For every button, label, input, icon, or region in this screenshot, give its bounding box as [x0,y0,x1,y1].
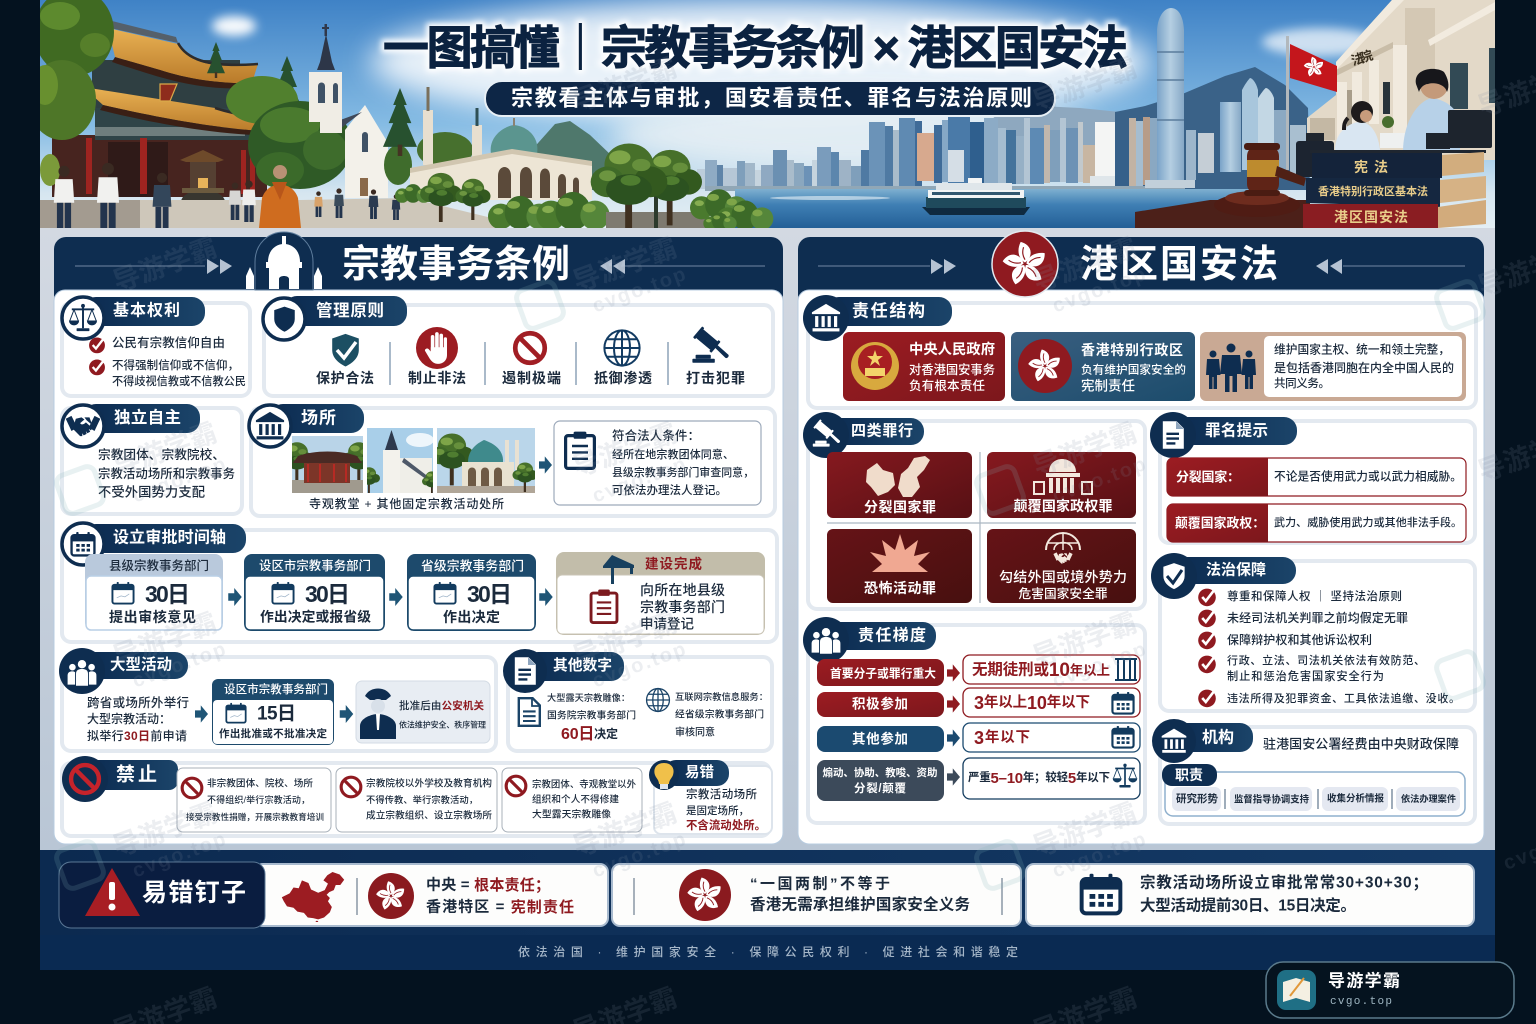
step: construction complete: 申请登记 [640,616,694,632]
section: 机构: 依法办理案件 [1401,793,1456,804]
section: 大型活动: 拟举行30日前申请 [87,728,187,743]
section: 法治保障: 保障辩护权和其他诉讼权利 [1227,632,1372,647]
box: ban 3 [502,768,642,832]
row: 积极参加: 3年以上10年以下 [974,693,1090,713]
box: 法人条件: 县级宗教事务部门审查同意， [612,465,754,479]
row: 分裂国家: 分裂国家： [1176,470,1240,484]
icon: no sign [515,333,545,363]
section: 机构: 研究形势 [1176,792,1218,805]
plaza and visitors [40,163,500,230]
row: 煽动协助 [817,758,1140,801]
section: 管理原则: 打击犯罪 [686,370,745,386]
pine and minarets [383,87,482,185]
section: 其他数字: 国务院宗教事务部门 [547,708,636,722]
watermarks: cvgo.top [590,453,690,507]
skyline [697,78,1306,191]
box: 15日: 15日 [257,704,296,724]
card: HKSAR: 宪制责任 [1081,378,1135,394]
gavel [1218,143,1306,205]
card: 分裂国家罪 [827,452,972,518]
step: province: 作出决定 [443,609,500,625]
card: 勾结外国罪 [987,529,1136,603]
box: ban 1 [177,768,331,832]
section: 禁止: 禁止 [116,764,157,786]
row: 积极参加: 积极参加 [852,696,908,712]
tagline strip [40,935,1495,970]
watermarks: 导游学霸 [569,607,681,673]
section: 法治保障: 违法所得及犯罪资金、工具依法追缴、没收。 [1227,691,1460,705]
section: 场所: 寺观教堂 + 其他固定宗教活动处所 [309,496,504,511]
row: 积极参加 [817,688,1140,717]
church [309,24,388,198]
row: 首要分子 [817,655,1140,686]
law books stack: 香港特别行政区基本法 [1318,184,1428,198]
section: 其他数字: 大型露天宗教雕像： [547,692,630,703]
hero banner illustration [28,0,1495,234]
box: ban 1: 不得组织/举行宗教活动， [207,794,310,805]
step: county [85,554,223,630]
tag: 易错钉子: 易错钉子 [142,879,246,907]
row: 煽动协助: 煽动、协助、教唆、资助 [822,766,938,779]
card: shared duty: 是包括香港同胞在内全中国人民的 [1274,360,1454,375]
right panel heading: 港区国安法 [1080,244,1278,286]
section: 大型活动: 大型宗教活动： [87,711,171,726]
card: 分裂国家罪: 分裂国家罪 [864,499,936,515]
section: 其他数字: 经省级宗教事务部门 [675,708,764,720]
footer band [40,850,1495,935]
left panel heading: 宗教事务条例 [342,244,570,286]
section: 场所 [249,404,775,516]
box: ban 2: 宗教院校以外学校及教育机构 [366,778,492,790]
icon: globe [604,330,640,366]
watermarks: 导游学霸 [109,607,221,673]
section: 法治保障: 制止和惩治危害国家安全行为 [1227,669,1384,683]
step: county: 县级宗教事务部门 [109,558,209,573]
section: 其他数字 [503,649,772,751]
box: ban 1: 非宗教团体、院校、场所 [207,778,313,790]
section: 其他数字: 审核同意 [675,726,715,738]
icon: stop hand [416,327,458,369]
subtitle pill [485,81,1055,116]
row: 其他参加 [817,723,1140,752]
card: HKSAR: 香港特别行政区 [1081,342,1183,358]
card: central government: 负有根本责任 [909,378,985,393]
right header arrows [818,259,1465,274]
section: 基本权利: 基本权利 [113,300,180,320]
step: province: 省级宗教事务部门 [421,558,524,574]
watermarks: 导游学霸 [1029,417,1141,483]
card: HKSAR [1011,332,1195,401]
far hills [994,106,1116,145]
court building: 法院 [1349,47,1375,69]
watermarks: 导游学霸 [569,52,681,118]
section: 场所: 场所 [301,408,336,428]
watermarks: cvgo.top [1050,638,1150,692]
section: 机构: 机构 [1202,728,1234,746]
section: 基本权利: 不得强制信仰或不信仰， [112,358,239,372]
icon: gavel [692,326,729,363]
step: county: 提出审核意见 [109,609,196,625]
row: 煽动协助: 分裂/颠覆 [854,781,906,795]
law books stack: 宪法 [1354,159,1388,175]
step: province: 30日 [467,581,512,607]
icon: church dome [246,232,322,290]
callout: 易错: 是固定场所， [686,804,749,817]
step: construction complete: 向所在地县级 [640,582,725,598]
foreground trees [395,144,773,234]
harbour water [735,189,1255,228]
box: ban 2 [336,768,497,832]
row: 其他参加: 其他参加 [852,730,908,746]
photo: church [367,428,433,493]
card: 一国两制: “一国两制”不等于 [750,874,890,892]
row: 煽动协助: 严重5–10年；较轻5年以下 [968,770,1110,786]
officers at desk [1296,69,1492,177]
section: 管理原则: 遏制极端 [502,370,561,386]
mosque [410,118,592,200]
section: 独立自主: 不受外国势力支配 [98,484,205,500]
card: 颠覆国家政权罪 [987,452,1136,518]
step: county: 30日 [145,581,190,607]
left trees [28,0,352,189]
card: 勾结外国罪: 危害国家安全罪 [1018,586,1108,601]
step: construction complete: 宗教事务部门 [640,599,725,615]
box: ban 3: 组织和个人不得修建 [532,794,619,806]
card: 颠覆国家政权罪: 颠覆国家政权罪 [1014,498,1112,514]
card: central government: 中央人民政府 [909,340,995,358]
box: 公安机关: 批准后由公安机关 [399,699,484,712]
section: 责任梯度: 责任梯度 [858,626,926,644]
row: 其他参加: 3年以下 [974,728,1030,748]
callout: 易错: 不含流动处所。 [686,818,766,832]
ferry [922,178,1030,215]
row: 颠覆国家政权 [1167,504,1466,542]
watermarks: cvgo.top [130,828,230,882]
section: 法治保障: 行政、立法、司法机关依法有效防范、 [1227,653,1425,667]
section: 机构: 收集分析情报 [1327,792,1384,804]
section: 法治保障 [1151,553,1475,711]
icon: crane [603,555,634,584]
law books stack [1303,150,1486,228]
section: 其他数字: 60日决定 [561,726,618,742]
section: 基本权利: 公民有宗教信仰自由 [112,335,225,350]
card: 根本责任 vs 宪制责任: 香港特区 = 宪制责任 [426,898,574,916]
row: 颠覆国家政权: 武力、威胁使用武力或其他非法手段。 [1274,515,1462,529]
box: ban 2: 成立宗教组织、设立宗教场所 [366,810,492,822]
section: 四类罪行 [803,412,1145,609]
watermarks: 导游学霸 [1029,232,1141,298]
section: 基本权利 [62,297,250,396]
watermarks: 导游学霸 [1029,607,1141,673]
card: shared duty [1200,332,1466,401]
section: 基本权利: 不得歧视信教或不信教公民 [112,374,246,388]
section: 设立审批时间轴: 设立审批时间轴 [113,528,226,546]
section: 禁止 [62,756,772,836]
section: 设立审批时间轴 [62,523,777,642]
watermarks: cvgo.top [590,638,690,692]
row: 首要分子: 无期徒刑或10年以上 [972,660,1110,680]
IFC tower [1157,8,1184,180]
left panel body [54,290,783,844]
watermarks: 导游学霸 [109,232,221,298]
box: 15日 [212,679,334,745]
section: 管理原则 [263,296,773,396]
watermarks: 导游学霸 [1029,52,1141,118]
subtitle pill: 宗教看主体与审批，国安看责任、罪名与法治原则 [511,86,1032,110]
left panel header bar [54,237,783,307]
section: 罪名提示: 罪名提示 [1205,422,1268,440]
HK flag [1286,36,1337,170]
card: 恐怖活动罪 [827,529,972,603]
watermarks: cvgo.top [1050,453,1150,507]
card: shared duty: 维护国家主权、统一和领土完整， [1274,342,1450,356]
panel: 港区国安法 [798,231,1484,844]
watermarks: 导游学霸 [109,417,221,483]
box: ban 3: 大型露天宗教雕像 [532,808,611,820]
section: 管理原则: 制止非法 [408,370,466,386]
watermarks: cvgo.top [130,638,230,692]
card: 根本责任 vs 宪制责任 [255,864,608,926]
row: 分裂国家 [1167,458,1466,496]
tag: 易错钉子 [59,862,265,928]
icon: shield check [332,334,359,366]
card: central government [843,332,1005,401]
section: 责任结构: 责任结构 [852,300,925,320]
main title: 一图搞懂｜宗教事务条例 × 港区国安法 [383,22,1128,74]
watermarks: 导游学霸 [109,797,221,863]
callout: 易错: 宗教活动场所 [686,787,758,801]
content background [40,228,1495,850]
card: 根本责任 vs 宪制责任: 中央 = 根本责任； [426,876,550,894]
logo badge: cvgo.top [1330,996,1392,1008]
right panel body [798,290,1484,844]
step: construction complete [556,552,765,635]
section: 四类罪行: 四类罪行 [851,422,913,440]
box: 法人条件: 可依法办理法人登记。 [612,483,727,497]
watermarks: cvgo.top [1050,828,1150,882]
panel: 宗教事务条例 [54,232,783,844]
card: 30+30+30: 宗教活动场所设立审批常常30+30+30； [1140,872,1428,892]
section: 独立自主: 宗教活动场所和宗教事务 [98,466,235,481]
temple [52,21,267,200]
court building [1307,0,1495,160]
row: 颠覆国家政权: 颠覆国家政权： [1175,516,1265,530]
step: city: 30日 [305,581,350,607]
watermarks: cvgo.top [130,453,230,507]
icon: HK emblem [992,231,1058,297]
card: 30+30+30 [1026,864,1474,926]
desk [1135,200,1310,228]
section: 责任梯度 [803,617,1145,823]
card: 恐怖活动罪: 恐怖活动罪 [864,580,936,596]
card: 一国两制 [612,864,1021,926]
section: 管理原则: 管理原则 [316,300,384,320]
law books stack: 港区国安法 [1334,209,1408,225]
step: construction complete: 建设完成 [645,556,702,572]
section: 管理原则: 抵御渗透 [594,370,652,386]
photo: mosque [430,428,538,493]
logo badge [1266,962,1514,1018]
watermarks: cvgo.top [1050,263,1150,317]
section: 机构: 职责 [1175,767,1203,783]
section: 独立自主 [62,404,242,514]
step: city: 设区市宗教事务部门 [259,558,371,573]
card: shared duty: 共同义务。 [1274,376,1330,390]
box: 公安机关: 依法维护安全、秩序管理 [399,720,486,730]
section: 责任结构 [803,295,1476,408]
row: 首要分子: 首要分子或罪行重大 [830,666,936,680]
watermarks: cvgo.top [590,828,690,882]
section: 大型活动 [59,648,496,751]
section: 机构 [1152,719,1475,824]
watermarks: cvgo.top [590,263,690,317]
main title: 一图搞懂｜宗教事务条例 × 港区国安法 [383,22,1128,74]
section: 机构: 监督指导协调支持 [1234,794,1310,804]
section: 法治保障: 未经司法机关判罪之前均假定无罪 [1227,610,1408,625]
right panel header bar [798,237,1484,307]
box: 法人条件: 符合法人条件： [612,428,700,443]
box: 15日: 作出批准或不批准决定 [219,727,328,740]
icon: police officer [360,688,396,739]
card: 勾结外国罪: 勾结外国或境外势力 [999,569,1127,585]
card: 30+30+30: 大型活动提前30日、15日决定。 [1140,896,1356,914]
watermarks: 导游学霸 [569,797,681,863]
logo badge: 导游学霸 [1328,970,1400,990]
box: ban 2: 不得传教、举行宗教活动， [366,794,478,805]
callout: 易错: 易错 [685,764,714,781]
section: 其他数字: 其他数字 [553,656,612,674]
step: city: 作出决定或报省级 [260,608,371,624]
section: 法治保障: 尊重和保障人权 ｜ 坚持法治原则 [1227,589,1402,603]
section: 罪名提示 [1150,412,1475,543]
section: 管理原则: 保护合法 [316,370,374,386]
section: 其他数字: 互联网宗教信息服务： [675,691,768,702]
section: 大型活动: 跨省或场所外举行 [87,695,189,710]
box: 法人条件 [554,421,761,505]
section: 独立自主: 宗教团体、宗教院校、 [98,447,225,462]
tagline strip: 依法治国 · 维护国家安全 · 保障公民权利 · 促进社会和谐稳定 [518,944,1018,959]
left header arrows [75,259,765,274]
watermarks: 导游学霸 [569,232,681,298]
card: central government: 对香港国安事务 [909,362,995,377]
box: ban 3: 宗教团体、寺观教堂以外 [532,778,637,790]
row: 分裂国家: 不论是否使用武力或以武力相威胁。 [1274,470,1462,484]
step: province [407,554,536,631]
callout: 易错 [649,760,772,834]
section: 法治保障: 法治保障 [1206,560,1266,578]
watermarks: 导游学霸 [569,417,681,483]
watermarks: 导游学霸 [1029,797,1141,863]
section: 大型活动: 大型活动 [110,656,172,674]
callout: 易错钉子 [59,862,1474,928]
section: 机构: 驻港国安公署经费由中央财政保障 [1263,736,1459,752]
photo: temple [292,436,363,493]
box: ban 1: 接受宗教性捐赠，开展宗教教育培训 [186,811,324,822]
card: 一国两制: 香港无需承担维护国家安全义务 [750,894,970,914]
box: 公安机关 [356,681,490,743]
step: city [244,554,385,631]
section: 独立自主: 独立自主 [114,407,181,427]
card: HKSAR: 负有维护国家安全的 [1081,362,1186,376]
box: 法人条件: 经所在地宗教团体同意、 [612,447,734,461]
box: 15日: 设区市宗教事务部门 [224,682,328,696]
